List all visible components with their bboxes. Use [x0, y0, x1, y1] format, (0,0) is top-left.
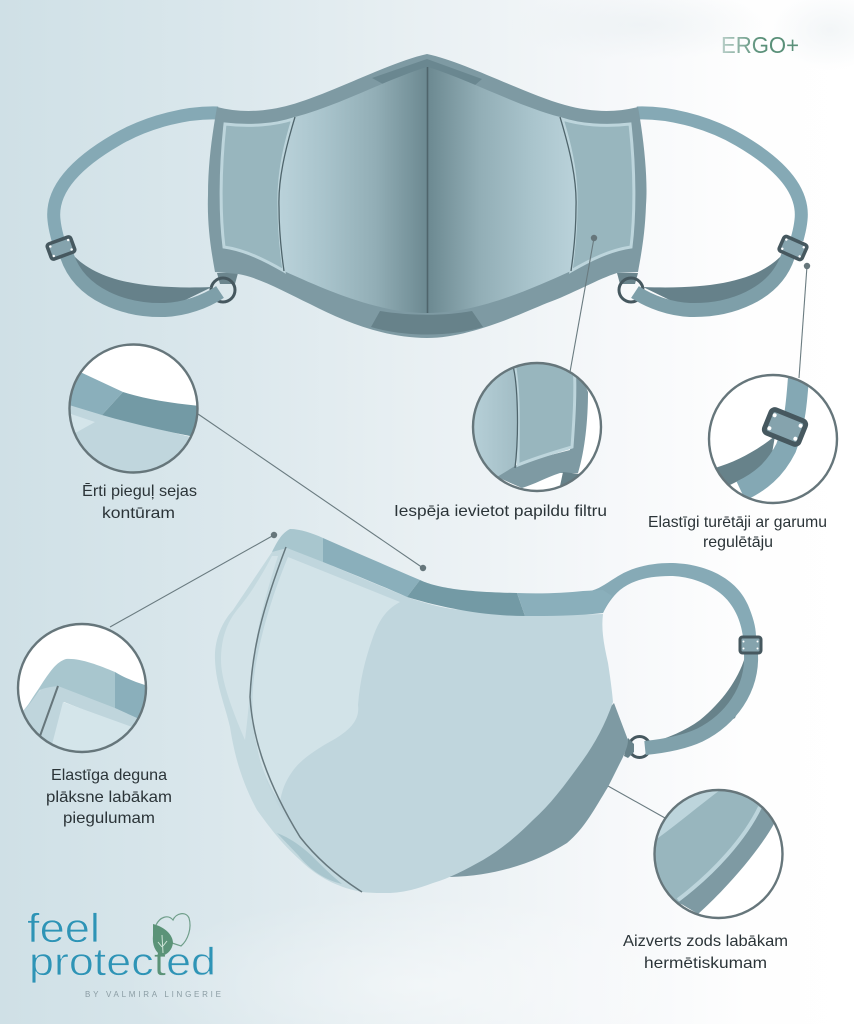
caption: filter pocket: Iespēja ievietot papildu filtru [394, 503, 607, 520]
inner panel [52, 702, 132, 751]
side ring [624, 736, 650, 758]
right ear strap [635, 113, 801, 310]
detail circle: closed chin [656, 791, 774, 914]
strap buckle [763, 408, 807, 446]
chin patch [371, 311, 483, 334]
gradient panel [474, 369, 517, 476]
caption: nose plate: plāksne labākam [46, 789, 172, 806]
side buckle [740, 637, 761, 653]
outer left fabric [215, 545, 400, 892]
top band mid section [323, 538, 420, 597]
left ear strap [54, 113, 220, 310]
inner light panel [252, 557, 400, 802]
right buckle [778, 236, 808, 260]
detail circle: filter pocket [472, 362, 603, 493]
fabric strip [24, 686, 137, 744]
side ear strap [590, 563, 756, 748]
left buckle [47, 236, 75, 260]
logo heart [156, 914, 190, 946]
dark band [498, 378, 588, 488]
caption: nose plate: piegulumam [63, 810, 155, 827]
detail circle ring: closed chin [654, 790, 782, 918]
top band dark section [407, 580, 525, 616]
caption: nose plate [46, 767, 172, 827]
side panel [514, 362, 575, 465]
chin shadow [430, 703, 628, 877]
logo: feel protected: protec ted [29, 941, 216, 984]
band dark section [115, 672, 145, 718]
caption: facial contour: Ērti pieguļ sejas [82, 482, 197, 500]
detail circle ring: facial contour [70, 344, 198, 472]
caption: closed chin: Aizverts zods labākam [623, 933, 788, 950]
right side panel [562, 119, 634, 271]
nose patches [372, 59, 482, 85]
right gradient panel [428, 67, 576, 313]
band light section [25, 659, 115, 710]
side bulge [221, 556, 278, 740]
detail circle: facial contour [70, 346, 196, 472]
caption: closed chin [623, 933, 788, 972]
top band end section [517, 590, 612, 616]
left side panel [221, 119, 293, 271]
main body [250, 547, 613, 893]
light fold [71, 414, 94, 432]
detail circle ring: adjustable strap [709, 375, 837, 503]
leader lines [110, 235, 810, 818]
right ring [617, 273, 643, 302]
caption: adjustable strap: regulētāju [703, 534, 773, 551]
left ring [211, 273, 238, 302]
dark band [678, 803, 775, 914]
detail circle: nose plate [19, 625, 145, 743]
nose seam [40, 686, 58, 736]
caption: closed chin: hermētiskumam [644, 955, 767, 972]
logo words: feel [27, 905, 100, 951]
front mask illustration [47, 54, 808, 338]
dark band segment [102, 392, 200, 437]
seam [513, 366, 517, 468]
detail circle ring: nose plate [18, 624, 146, 752]
tab [560, 472, 580, 486]
caption: adjustable strap [648, 514, 827, 551]
lower body [70, 406, 190, 472]
panel [656, 791, 760, 904]
light band segment [70, 372, 123, 415]
caption: facial contour: kontūram [102, 505, 175, 522]
seams [279, 67, 576, 313]
logo leaf [153, 924, 173, 956]
light corner [658, 791, 718, 838]
caption: facial contour [82, 482, 197, 522]
side mask illustration [215, 529, 761, 893]
detail circle ring: filter pocket [473, 363, 601, 491]
strap shadow [715, 436, 775, 486]
left gradient panel [279, 67, 427, 313]
top band light section [272, 529, 323, 562]
light stripe [678, 807, 760, 900]
logo tagline: BY VALMIRA LINGERIE [85, 990, 221, 999]
brand name ERGO+: ERGO+ [721, 32, 799, 58]
logo: feel protected [27, 905, 221, 999]
caption: nose plate: Elastīga deguna [51, 767, 167, 784]
bottom fold [277, 833, 342, 884]
detail circle: adjustable strap [717, 378, 808, 498]
nose-to-chin seam [250, 547, 362, 892]
mask outer band [208, 54, 647, 338]
strap [741, 370, 799, 491]
caption: adjustable strap: Elastīgi turētāji ar garumu [648, 514, 827, 531]
